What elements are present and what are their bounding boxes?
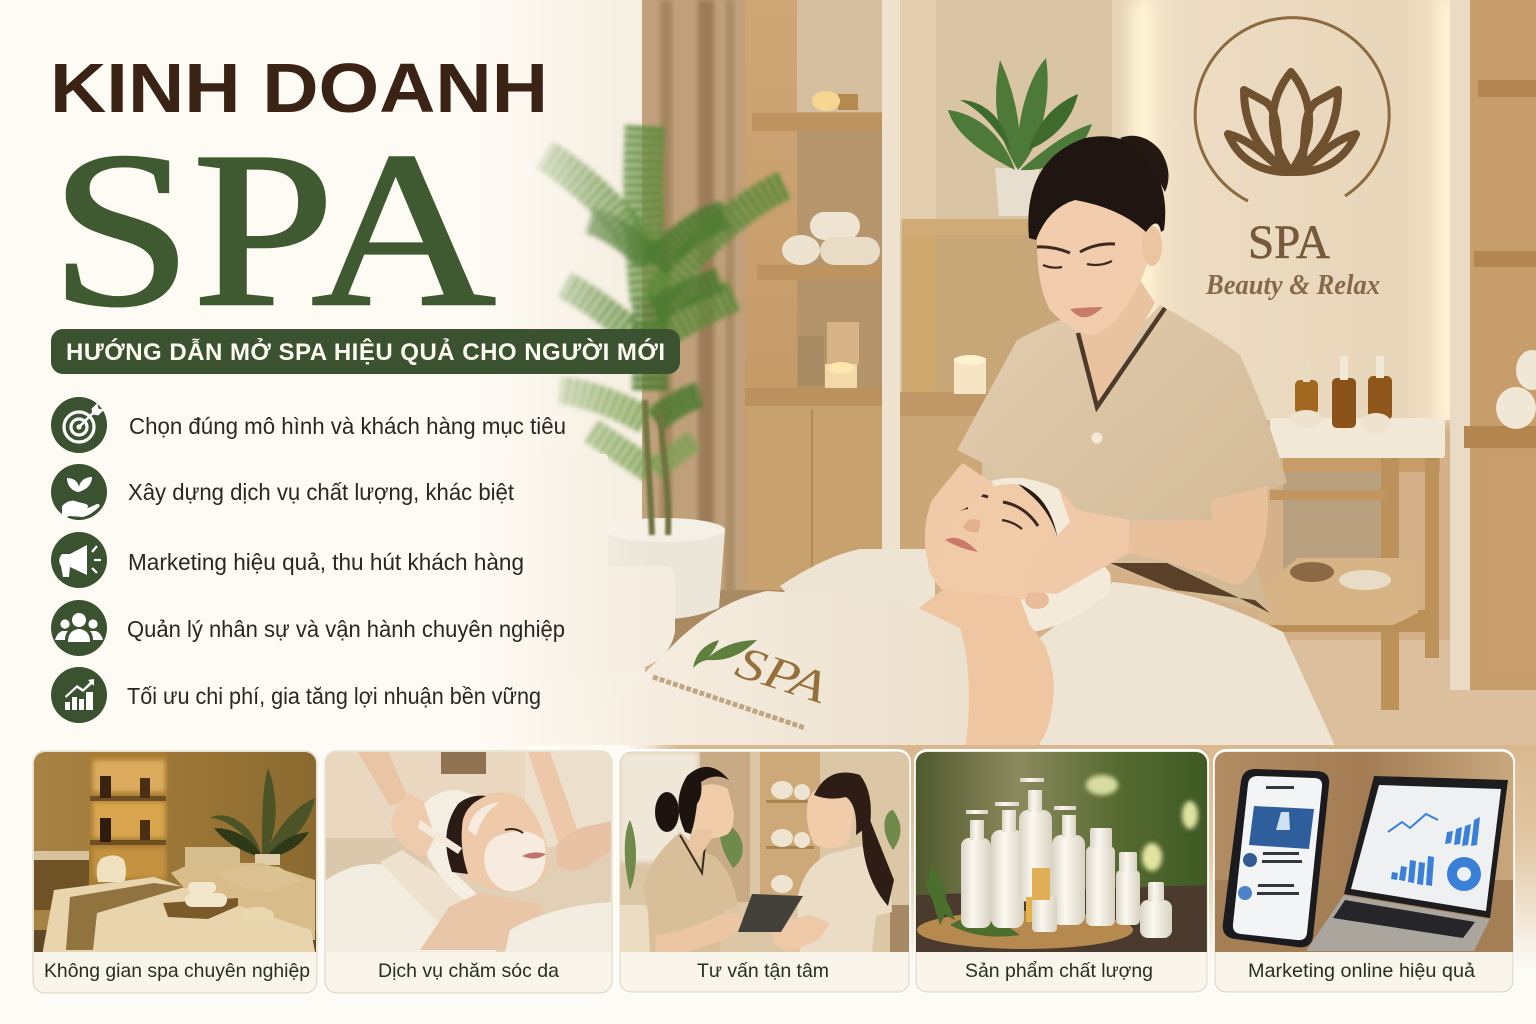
subtitle banner: HƯỚNG DẪN MỞ SPA HIỆU QUẢ CHO NGƯỜI MỚI <box>66 337 665 366</box>
card 3 photo <box>620 752 909 952</box>
item 1: target <box>51 397 566 453</box>
card: products <box>914 749 1209 994</box>
item 4: people: Quản lý nhân sự và vận hành chuyên nghiệp <box>127 616 565 642</box>
first bed <box>43 877 315 952</box>
subtitle banner <box>51 329 680 374</box>
card 3 caption: Tư vấn tận tâm <box>697 960 829 982</box>
torso uniform <box>957 305 1287 613</box>
card 2 photo <box>326 752 611 952</box>
bottom fade band <box>0 745 1536 1024</box>
card: skincare <box>325 751 612 993</box>
body towel with SPA logo <box>645 591 969 745</box>
card 5 caption: Marketing online hiệu quả <box>1248 960 1475 982</box>
therapist hands <box>925 463 1130 594</box>
card 1 photo <box>34 752 316 952</box>
item 1: target: Chọn đúng mô hình và khách hàng mục tiêu <box>129 413 566 439</box>
logo wall panel <box>1130 0 1456 420</box>
client head towel <box>990 478 1111 632</box>
item 5: growth chart <box>51 667 541 723</box>
logo text: SPA <box>1248 216 1330 269</box>
client face <box>928 484 1058 609</box>
console table with amber bottles <box>1258 356 1445 710</box>
left white fade <box>0 0 650 760</box>
hair <box>1028 136 1165 240</box>
card: online marketing <box>1213 749 1515 994</box>
massage table <box>780 549 1336 748</box>
potted plant on shelf <box>948 58 1092 216</box>
curtain <box>642 0 745 600</box>
item 5: growth chart: Tối ưu chi phí, gia tăng lợi nhuận bền vững <box>127 683 541 709</box>
face <box>1037 190 1148 335</box>
therapist <box>957 136 1287 613</box>
counselor <box>643 832 738 952</box>
candles on shelf <box>798 91 859 388</box>
tablet <box>738 894 803 932</box>
rolled towels <box>782 212 880 265</box>
card 1 caption: Không gian spa chuyên nghiệp <box>44 960 310 982</box>
floor <box>1290 640 1536 745</box>
lotus icon <box>1228 72 1356 172</box>
laptop <box>1344 776 1508 918</box>
main title KINH DOANH: KINH DOANH <box>50 49 548 127</box>
phone <box>1223 769 1329 947</box>
item 3: megaphone: Marketing hiệu quả, thu hút khách hàng <box>128 549 524 575</box>
facial features <box>1037 244 1115 268</box>
main title SPA: SPA <box>50 107 496 353</box>
second bed <box>171 863 315 940</box>
circular logo ring <box>1195 18 1389 201</box>
sofa <box>598 454 675 667</box>
main spa photo scene <box>480 0 1536 760</box>
wooden shelf unit left <box>745 0 883 590</box>
card 4 photo <box>916 752 1207 952</box>
floor-standing palm plant <box>545 125 785 619</box>
client <box>797 846 892 952</box>
client neck and shoulder <box>913 590 1054 748</box>
neck <box>1078 280 1155 405</box>
towel SPA text: SPA <box>730 636 834 713</box>
item 4: people <box>51 600 565 656</box>
item 2: hand with leaf <box>51 464 515 520</box>
towel leaf mark <box>693 640 757 668</box>
card 5 photo <box>1215 752 1513 952</box>
card: spa room <box>33 751 317 993</box>
item 3: megaphone <box>51 532 524 588</box>
card 2 caption: Dịch vụ chăm sóc da <box>378 960 559 982</box>
card: consultation <box>618 749 911 994</box>
logo wall panel: Beauty & Relax <box>1205 269 1380 301</box>
card 4 caption: Sản phẩm chất lượng <box>965 960 1153 982</box>
middle shelf <box>900 0 1115 560</box>
item 2: hand with leaf: Xây dựng dịch vụ chất lượng, khác biệt <box>128 479 515 505</box>
right arm <box>1126 486 1268 584</box>
benefit list <box>51 397 566 723</box>
right shelf unit <box>1464 0 1536 690</box>
